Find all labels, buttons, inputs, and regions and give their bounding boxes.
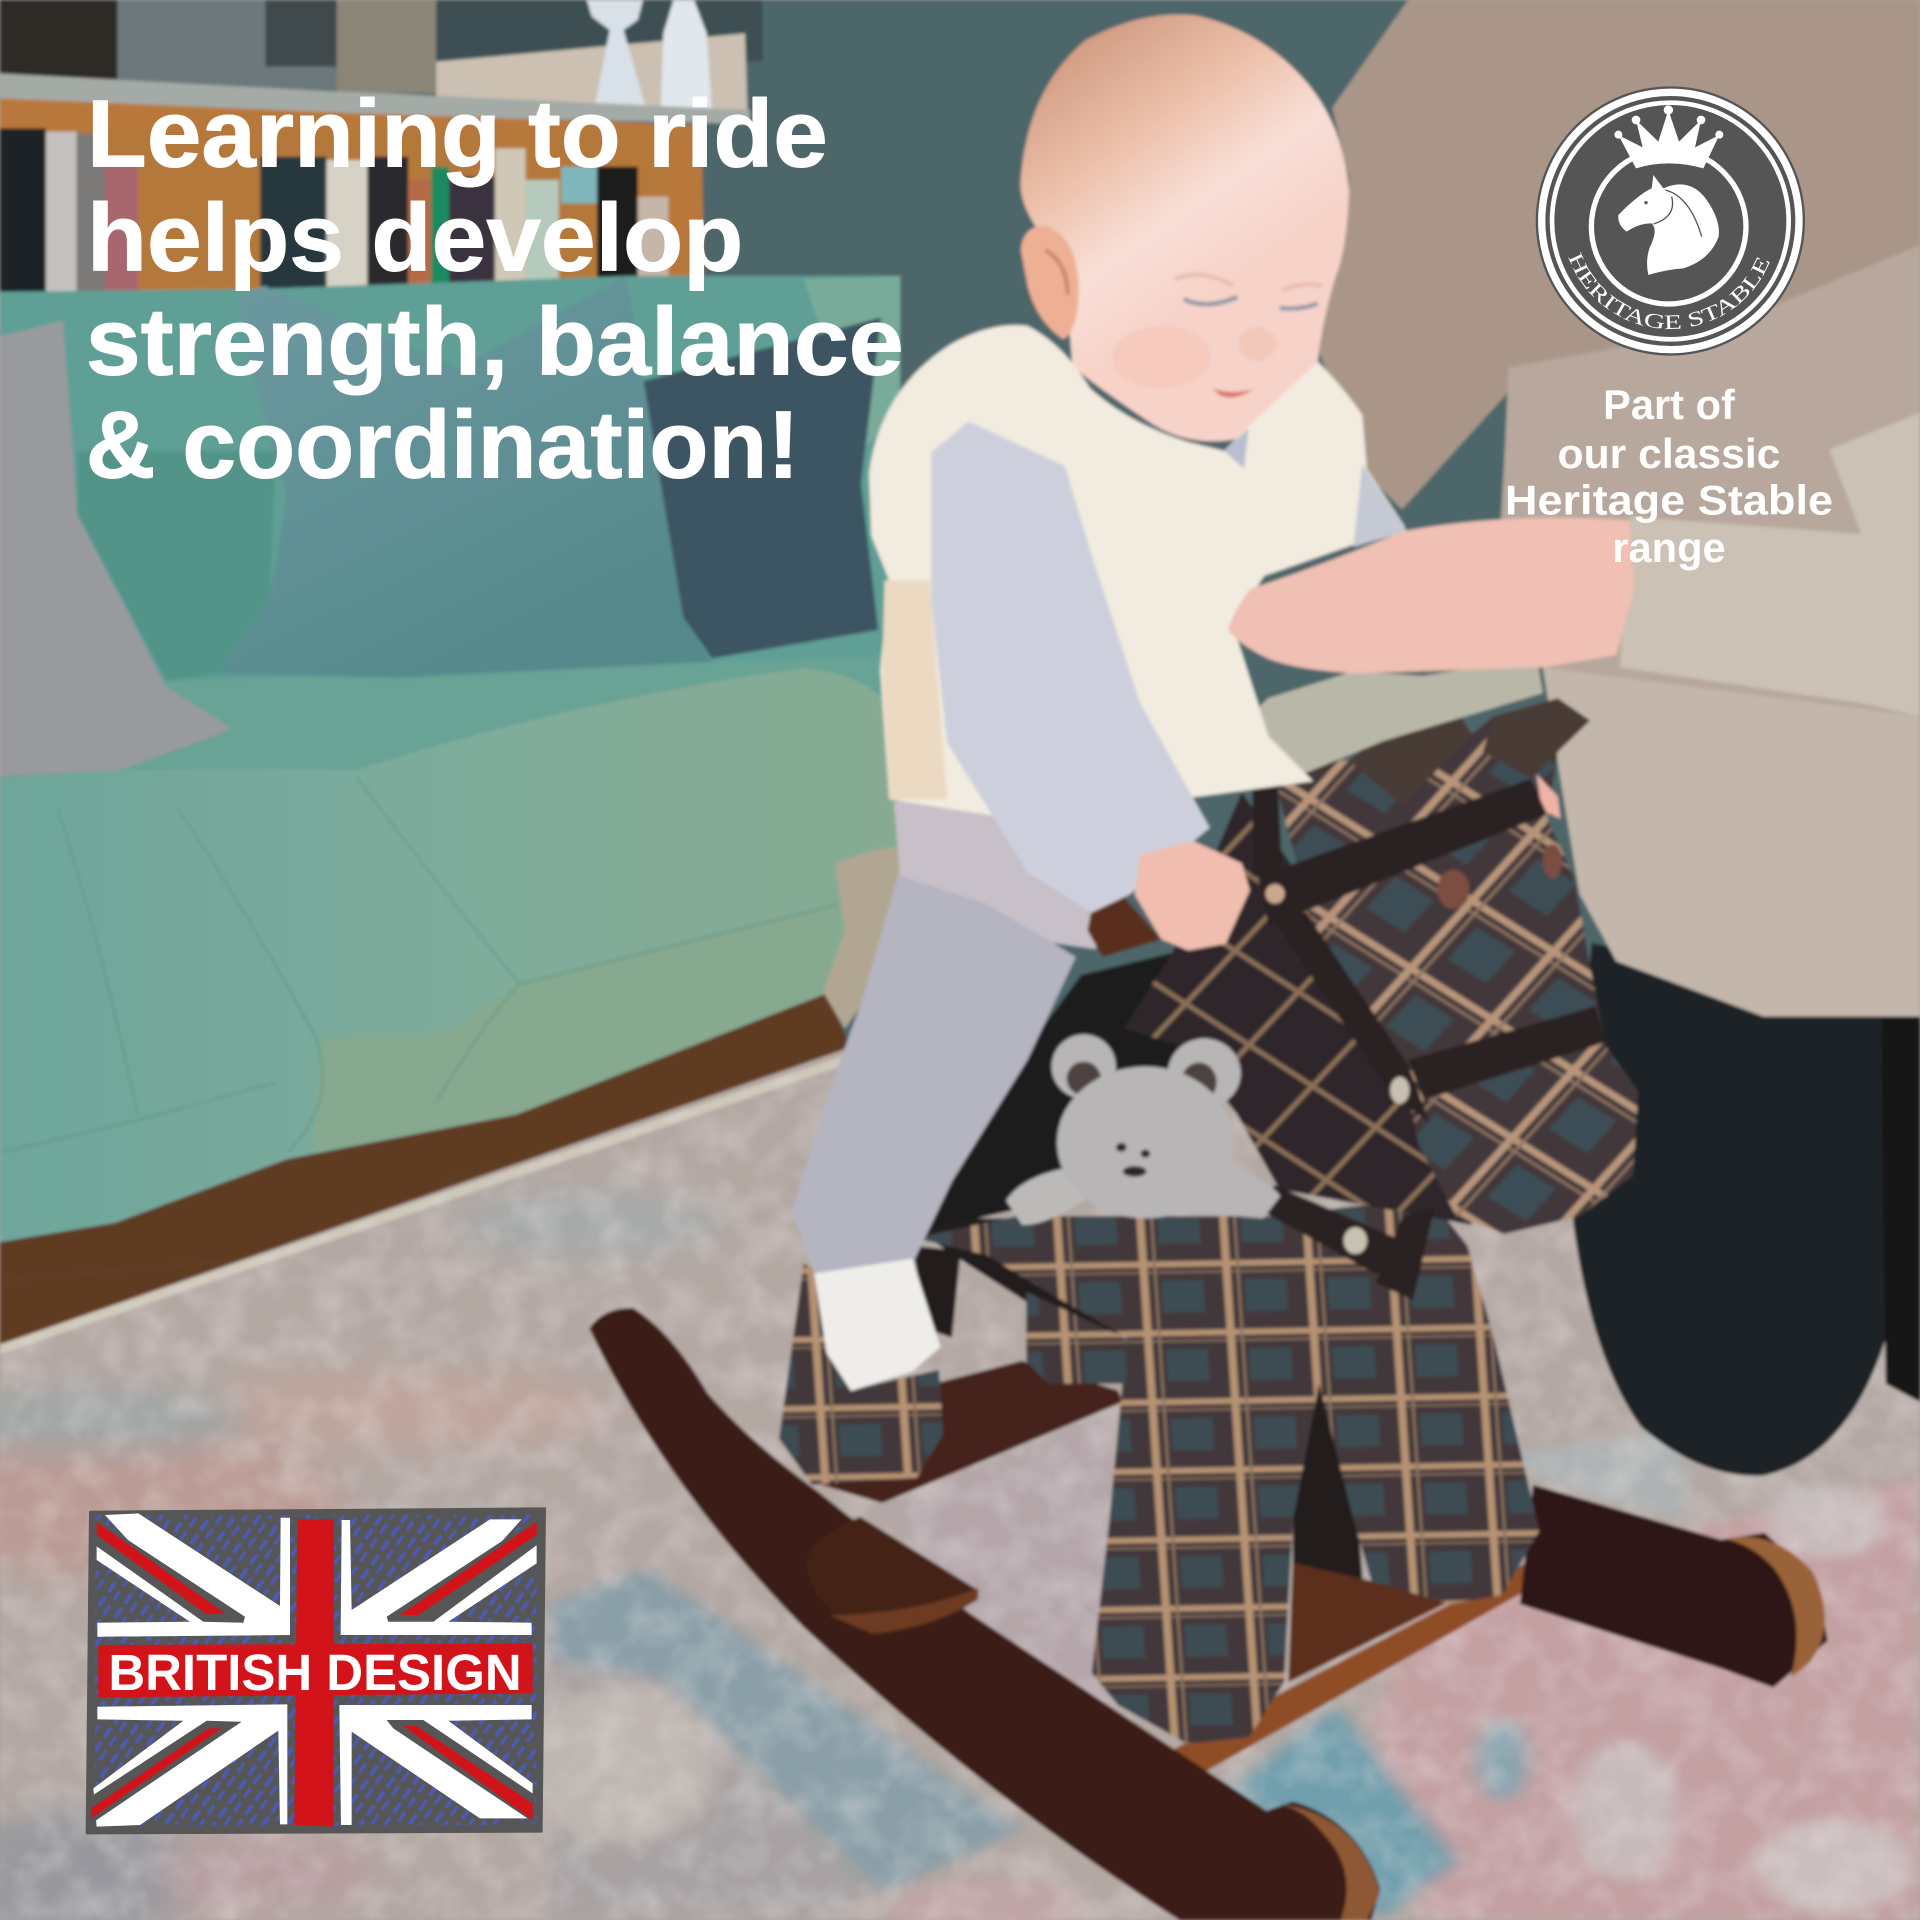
baby: leggings	[792, 872, 1076, 1300]
adult: sweater	[1318, 0, 1920, 1016]
baby: sock	[814, 1259, 940, 1391]
flag arms bottom-right	[339, 1705, 535, 1827]
baby: onesie	[894, 784, 1102, 949]
handle	[1088, 897, 1161, 957]
flag arms bottom-left	[91, 1704, 287, 1827]
baby: hand	[1135, 841, 1250, 950]
blanket mane	[823, 658, 1543, 1029]
baby: arm	[931, 421, 1210, 913]
icon: crown	[1614, 105, 1723, 168]
wall	[0, 0, 1920, 1102]
caption: Heritage Stable range: our classic	[1558, 430, 1780, 477]
red cross	[98, 1519, 533, 1827]
bridle studs	[1265, 844, 1562, 1254]
flag arms top-right	[341, 1517, 538, 1635]
adult: hand	[1228, 518, 1635, 673]
baby: vest	[869, 325, 1407, 817]
rocker: front rail	[589, 1308, 1380, 1920]
horse: saddle, neck and head	[910, 694, 1638, 1234]
badge text: HERITAGE STABLE	[1568, 252, 1770, 330]
badge disc	[1536, 86, 1805, 356]
rocker: back rail and boards	[821, 1361, 1828, 1774]
adult: trousers	[1570, 943, 1920, 1476]
horse: body and front legs	[915, 1198, 1539, 1744]
cushions	[0, 276, 881, 777]
wood floor	[0, 993, 850, 1370]
sofa	[0, 276, 900, 1242]
title	[86, 82, 904, 499]
baby: head	[1021, 14, 1349, 441]
rug	[0, 1047, 1920, 1920]
caption: Heritage Stable range: Part of	[1603, 381, 1735, 428]
caption: Heritage Stable range: Heritage Stable	[1505, 476, 1833, 523]
title: & coordination!	[86, 393, 800, 499]
icon: horse head	[1618, 175, 1719, 275]
flag background	[87, 1508, 545, 1833]
bridle straps	[1252, 752, 1606, 1300]
horse: rear legs	[779, 1218, 1162, 1485]
badge: British Design flag	[87, 1508, 545, 1833]
badge: Heritage Stable logo	[1536, 86, 1805, 356]
title: Learning to ride	[87, 82, 828, 188]
caption: Heritage Stable range: range	[1612, 524, 1726, 571]
caption: Heritage Stable range	[1505, 381, 1833, 571]
flag arms top-left	[93, 1513, 290, 1637]
teddy bear	[1006, 1034, 1280, 1225]
title: helps develop	[87, 186, 743, 292]
flag text: BRITISH DESIGN	[108, 1644, 522, 1701]
title: strength, balance	[86, 290, 904, 396]
bookshelf	[0, 0, 763, 293]
